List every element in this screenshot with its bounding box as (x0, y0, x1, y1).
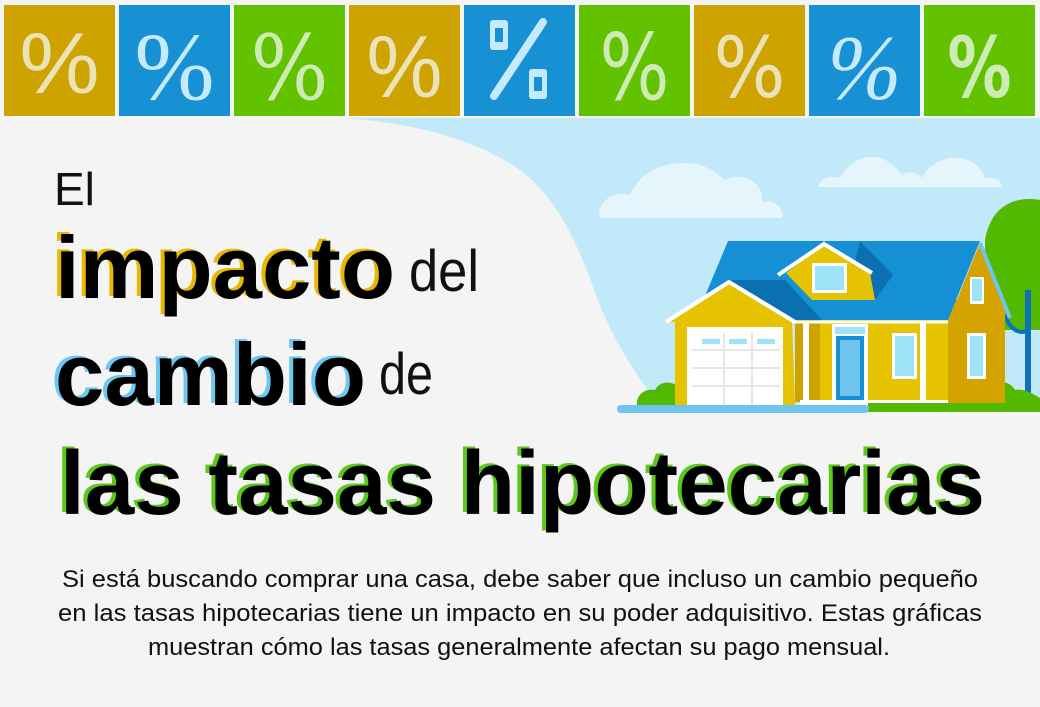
tile 1 (4, 5, 115, 116)
bushes (637, 382, 685, 405)
tile 7: % (714, 19, 786, 117)
title line: las tasas hipotecarias: las tasas hipotecarias (56, 432, 981, 532)
sky background (345, 118, 1040, 406)
title line: cambio de: cambio (51, 323, 362, 422)
tile 8: % (828, 17, 902, 119)
intro paragraph: en las tasas hipotecarias tiene un impacto en su poder adquisitivo. Estas gráficas (58, 600, 982, 627)
tile 3: % (250, 16, 328, 121)
tile 2: % (134, 13, 214, 120)
garage door (687, 327, 783, 405)
title line: las tasas hipotecarias: las tasas hipotecarias (60, 434, 985, 534)
tile 4: % (366, 17, 442, 116)
dormer (786, 245, 875, 300)
ground line (868, 403, 1040, 412)
tree (985, 199, 1040, 405)
tile 3 (234, 5, 345, 121)
right wing (948, 300, 1005, 405)
title line: cambio de: de (379, 342, 433, 407)
intro paragraph (58, 566, 982, 661)
tile 9 (924, 5, 1035, 117)
tile 6: % (600, 14, 670, 121)
tile 1: % (20, 16, 99, 112)
tile 4 (349, 5, 460, 116)
door (832, 324, 868, 402)
main roof (705, 241, 980, 322)
main body (795, 320, 948, 402)
tile 5 (464, 5, 575, 116)
title line: impacto del: impacto (51, 216, 391, 315)
porch columns (803, 322, 809, 402)
title line: El: El (54, 163, 95, 215)
tile 8 (809, 5, 920, 119)
intro paragraph: muestran cómo las tasas generalmente afectan su pago mensual. (148, 634, 890, 661)
title line: impacto del: impacto (55, 218, 395, 317)
tile 6 (579, 5, 690, 121)
title (51, 163, 985, 534)
tile 9: % (948, 19, 1012, 117)
title line: impacto del: del (409, 239, 479, 304)
windows (892, 333, 917, 379)
intro paragraph: Si está buscando comprar una casa, debe saber que incluso un cambio pequeño (62, 566, 978, 593)
percent tiles row (4, 5, 1035, 121)
garage gable (668, 283, 795, 405)
house illustration (617, 199, 1040, 413)
title line: cambio de: cambio (55, 325, 366, 424)
tile 2 (119, 5, 230, 120)
tile 7 (694, 5, 805, 117)
clouds (599, 157, 1002, 218)
